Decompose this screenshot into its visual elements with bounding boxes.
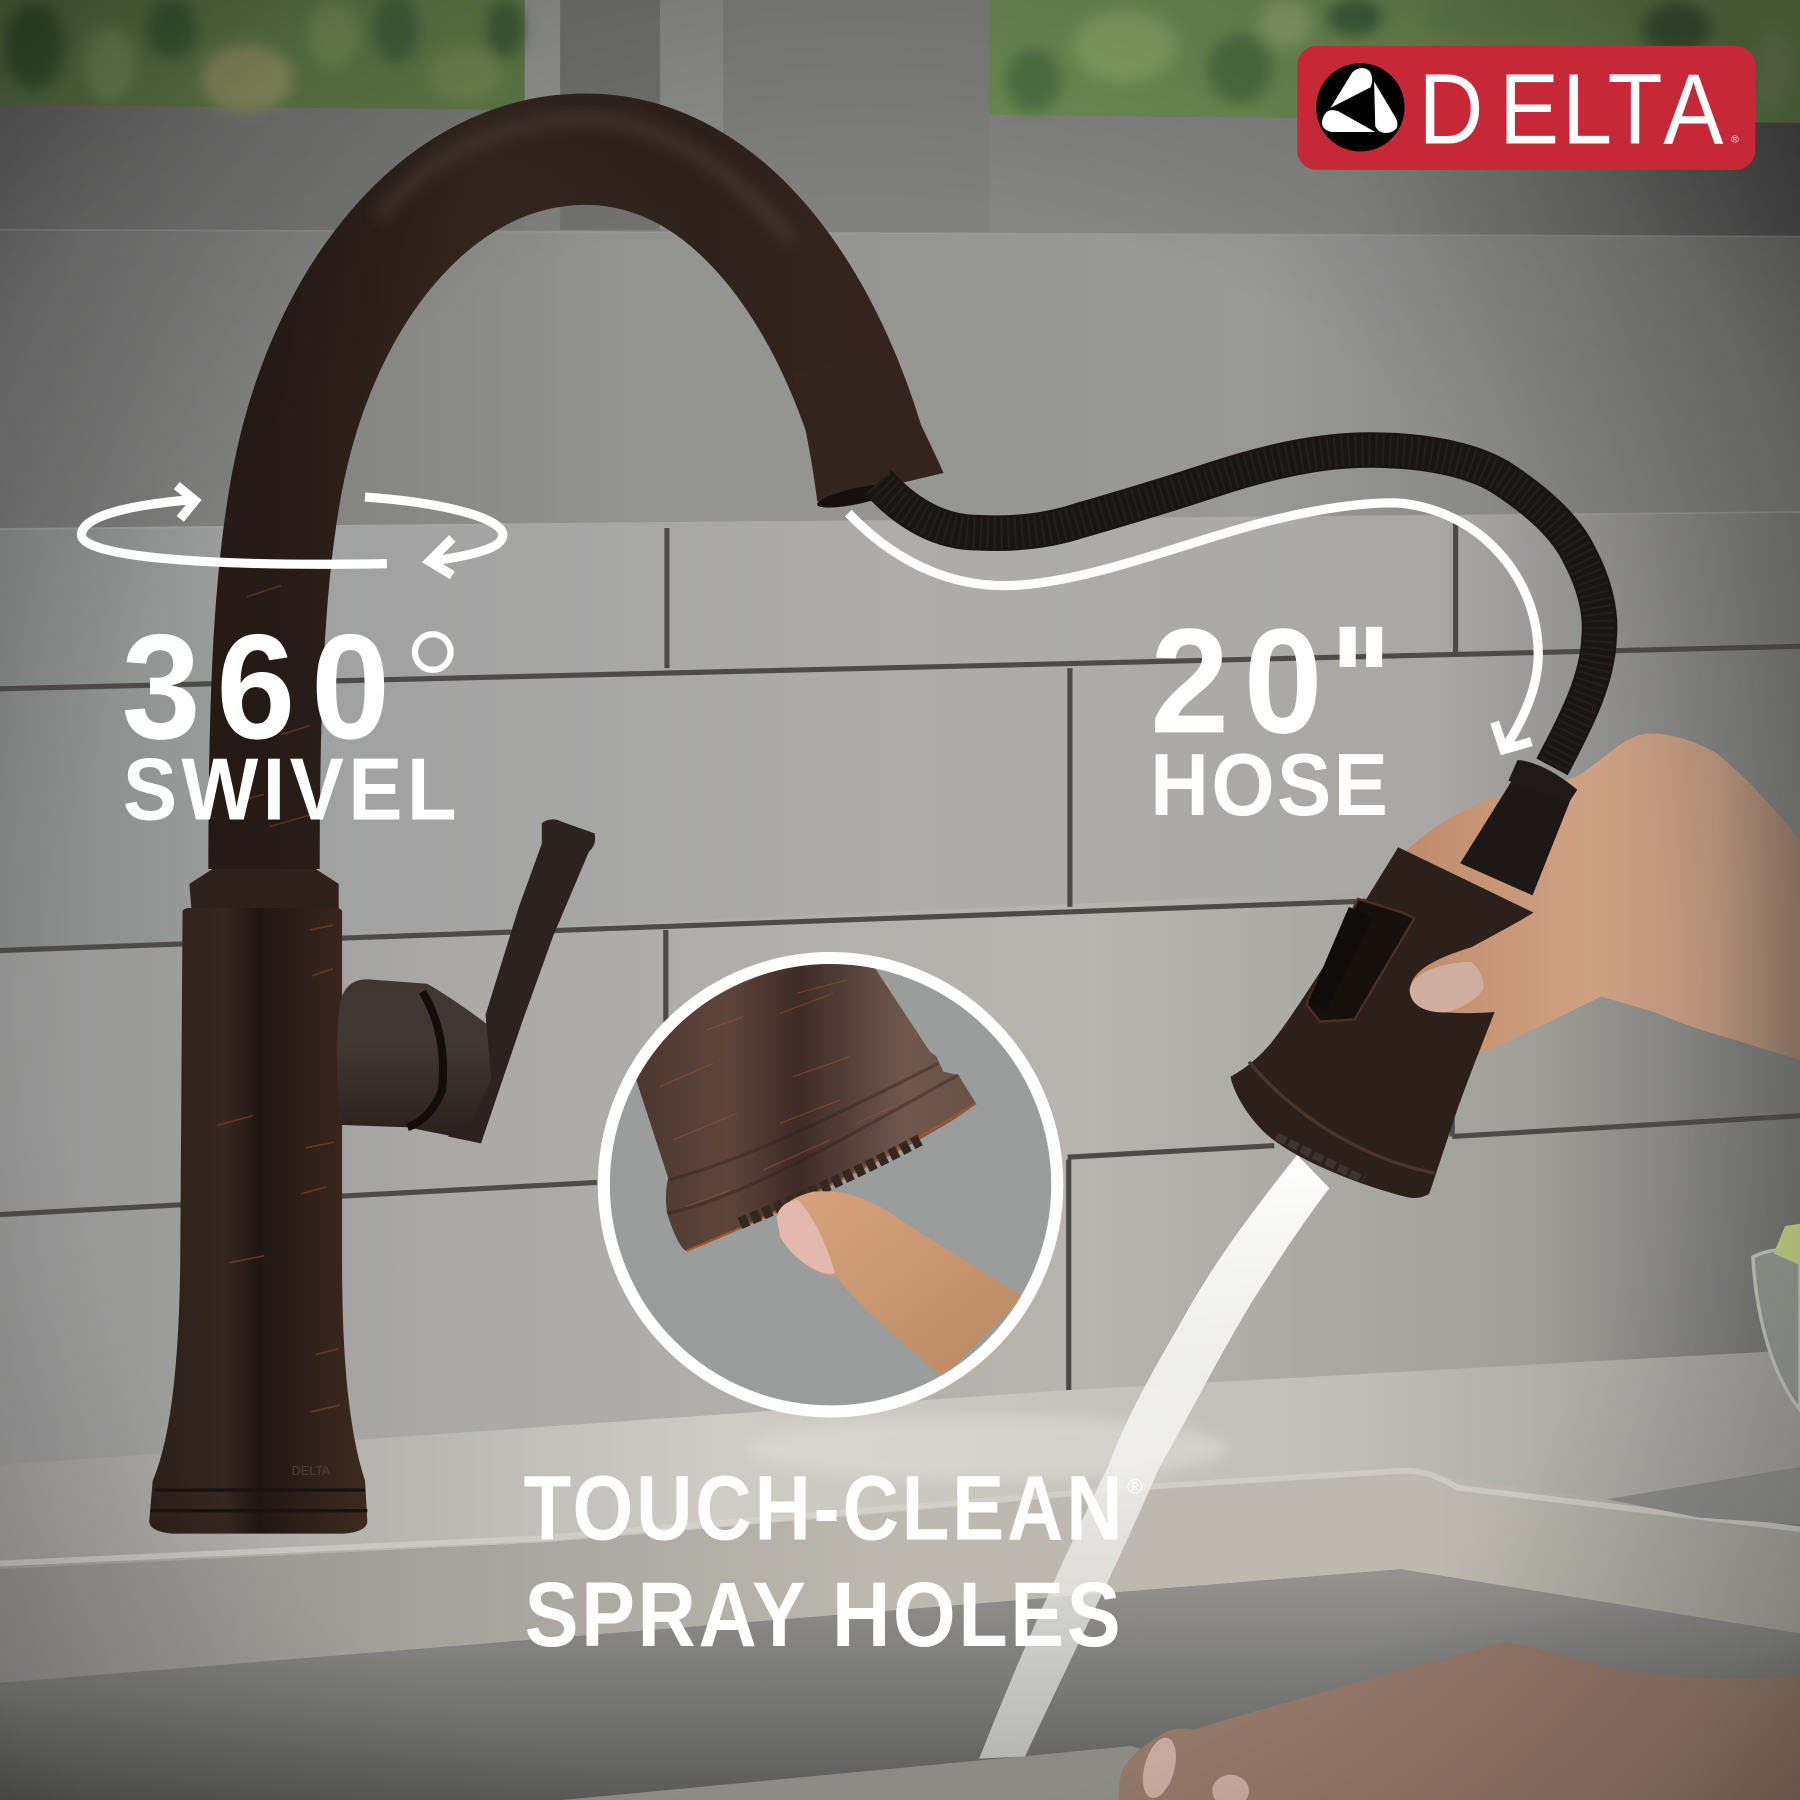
touch-clean label: ® — [1127, 1475, 1143, 1498]
faucet base body: DELTA — [292, 1464, 331, 1478]
window frame — [525, 0, 990, 235]
countertop surface — [0, 1350, 1800, 1569]
wall: middle tile courses — [0, 512, 1800, 953]
handle lever — [448, 819, 595, 1143]
fingernail — [777, 1200, 835, 1274]
near counter edge — [562, 1746, 1332, 1800]
touch-clean label — [523, 1458, 1143, 1666]
finger — [777, 1191, 1023, 1378]
sink rim highlight — [0, 1471, 1800, 1564]
logo: Delta — [1297, 46, 1755, 170]
faucet spout — [230, 118, 944, 869]
spray nozzles — [740, 1140, 920, 1223]
counter reflection highlight — [746, 1417, 1228, 1481]
wall: lower tile courses — [0, 872, 1800, 1469]
water stream — [979, 1155, 1329, 1759]
counter front and sink rim — [0, 1471, 1800, 1683]
handle ring shadow — [408, 992, 443, 1127]
window left: foliage — [0, 0, 525, 112]
right counter behind sink — [1607, 1467, 1800, 1524]
thumb — [1410, 879, 1653, 1013]
window right: foliage — [990, 0, 1800, 123]
thumbnail — [1410, 962, 1483, 1012]
hose — [878, 450, 1600, 767]
hose length arrow — [848, 503, 1538, 750]
handle connector — [337, 979, 494, 1136]
swivel arrows — [82, 486, 503, 575]
hand holding sprayer — [1380, 734, 1800, 1060]
hose label — [1150, 597, 1388, 834]
spray head bell — [636, 964, 976, 1252]
touch-clean label: TOUCH-CLEAN — [523, 1458, 1123, 1560]
tile seam highlights — [0, 230, 1800, 529]
logo: Delta: DELTA — [1419, 54, 1724, 166]
sprayer head — [1231, 760, 1577, 1198]
lower hand under water — [1119, 1642, 1800, 1800]
swivel label — [122, 603, 457, 838]
tile grout lines — [0, 522, 1800, 1391]
hose label: HOSE — [1150, 735, 1388, 834]
hose label: 20 — [1150, 597, 1323, 764]
sink basin — [0, 1569, 1800, 1800]
faucet base body — [149, 869, 367, 1534]
swivel label: SWIVEL — [123, 740, 457, 838]
background: wall band — [0, 0, 1800, 241]
swivel label: 360 — [122, 603, 390, 770]
circular inset: touch-clean spray holes — [604, 935, 1057, 1411]
bowl at right edge — [1753, 1224, 1800, 1410]
touch-clean label: SPRAY HOLES — [525, 1564, 1121, 1666]
logo: Delta: ® — [1731, 134, 1739, 145]
wall: upper tile course — [0, 230, 1800, 530]
